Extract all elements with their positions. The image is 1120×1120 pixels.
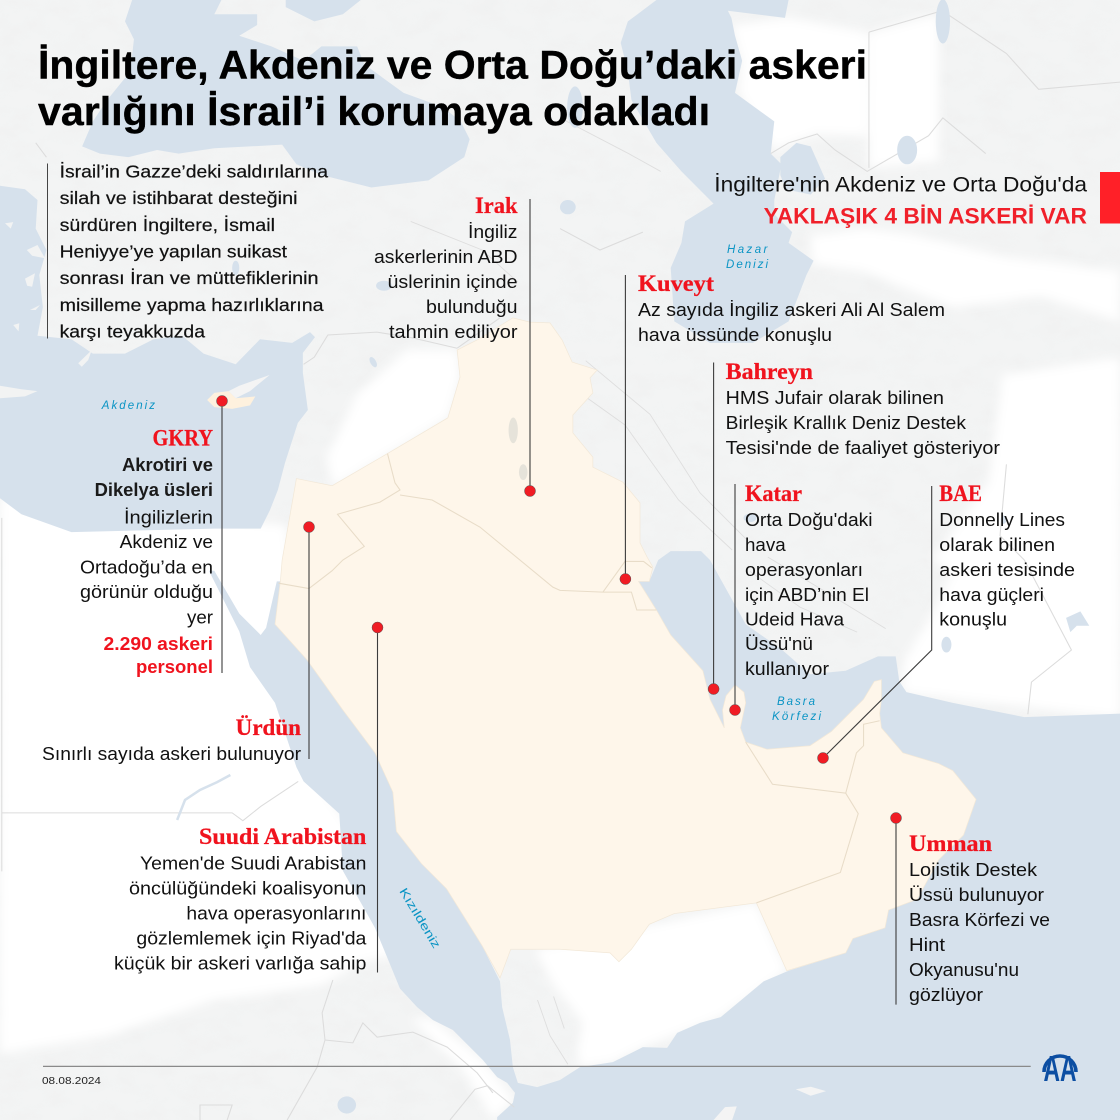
panel: Bahreyn: HMS Jufair olarak bilinen <box>726 387 944 408</box>
panel: Suudi Arabistan: Yemen'de Suudi Arabistan <box>140 853 366 874</box>
sea labels: Hazar <box>727 244 769 256</box>
panel: GKRY: görünür olduğu <box>80 581 213 602</box>
panel: BAE: olarak bilinen <box>939 534 1055 555</box>
intro text block: silah ve istihbarat desteğini <box>60 188 297 208</box>
panel: Bahreyn <box>708 359 1000 694</box>
panel: Kuveyt: hava üssünde konuşlu <box>638 324 832 345</box>
panel: BAE <box>818 481 1075 764</box>
Caspian Sea <box>621 0 814 343</box>
panel: GKRY <box>80 396 228 677</box>
panel: Kuveyt: Kuveyt <box>638 271 714 296</box>
icon: AA logo <box>1044 1048 1076 1089</box>
title: İngiltere, Akdeniz ve Orta Doğu’daki askeri <box>38 44 867 88</box>
panel: Suudi Arabistan: hava operasyonlarını <box>186 903 366 924</box>
panel: GKRY: personel <box>136 656 213 677</box>
intro text block <box>48 162 328 342</box>
intro text block: sonrası İran ve müttefiklerinin <box>60 268 319 288</box>
panel: Suudi Arabistan: gözlemlemek için Riyad'da <box>136 928 367 949</box>
panel: Irak: bulunduğu <box>426 296 518 317</box>
panel: Suudi Arabistan: Suudi Arabistan <box>199 824 367 849</box>
panel: BAE: BAE <box>939 481 982 506</box>
panel: BAE: konuşlu <box>939 609 1007 630</box>
sea labels: Körfezi <box>772 711 821 723</box>
Arabian Peninsula and Iraq highlighted land <box>275 318 976 978</box>
Cyprus <box>207 391 255 409</box>
top right callout <box>714 172 1120 229</box>
red accent bar <box>1100 172 1120 224</box>
islands <box>0 222 826 1120</box>
panel: Irak: askerlerinin ABD <box>374 246 518 267</box>
sea labels: Kızıldeniz <box>396 885 443 951</box>
panel: Katar: Üssü'nü <box>745 633 813 654</box>
panel: Katar: için ABD’nin El <box>745 584 869 605</box>
panel: Bahreyn: Bahreyn <box>726 359 813 384</box>
Black Sea <box>82 0 470 188</box>
intro text block: İsrail’in Gazze’deki saldırılarına <box>60 162 328 182</box>
panel: Irak: Irak <box>475 193 518 218</box>
panel: Umman: Basra Körfezi ve <box>909 909 1050 930</box>
panel: Irak <box>374 193 536 496</box>
panel: Katar <box>730 481 872 716</box>
icon: AA logo: AA <box>1044 1048 1076 1089</box>
panel: GKRY: 2.290 askeri <box>104 633 213 654</box>
sea labels: Akdeniz <box>101 400 155 412</box>
panel: Suudi Arabistan: öncülüğündeki koalisyonun <box>129 878 366 899</box>
sea labels: Basra <box>777 696 815 708</box>
intro text block: Heniyye’ye yapılan suikast <box>60 242 287 262</box>
panel: Katar: operasyonları <box>745 559 863 580</box>
panel: GKRY: yer <box>187 607 213 628</box>
intro text block: sürdüren İngiltere, İsmail <box>60 215 275 235</box>
panel: Umman: Üssü bulunuyor <box>909 884 1044 905</box>
panel: Suudi Arabistan <box>114 622 383 974</box>
panel: GKRY: Dikelya üsleri <box>95 479 213 500</box>
panel: Umman: Umman <box>909 831 992 856</box>
panel: BAE: hava güçleri <box>939 584 1044 605</box>
panel: Katar: Katar <box>745 481 802 506</box>
sea labels <box>101 244 821 951</box>
panel: Umman: gözlüyor <box>909 984 983 1005</box>
Lake Nasser <box>177 775 230 820</box>
date: 08.08.2024 <box>42 1075 101 1087</box>
panel: Irak: üslerinin içinde <box>388 271 518 292</box>
panel: BAE: Donnelly Lines <box>939 509 1065 530</box>
panel: GKRY: GKRY <box>152 426 213 451</box>
panel: GKRY: Akrotiri ve <box>122 454 213 475</box>
panel: Irak: İngiliz <box>468 221 518 242</box>
top right callout: İngiltere'nin Akdeniz ve Orta Doğu'da <box>714 174 1087 196</box>
panel: GKRY: Ortadoğu’da en <box>80 557 213 578</box>
panel: GKRY: İngilizlerin <box>124 507 213 528</box>
panel: Ürdün: Sınırlı sayıda askeri bulunuyor <box>42 743 301 764</box>
panel: Umman: Okyanusu'nu <box>909 959 1019 980</box>
intro text block: karşı teyakkuzda <box>60 322 205 342</box>
panel: BAE: askeri tesisinde <box>939 559 1075 580</box>
panel: GKRY: Akdeniz ve <box>120 531 213 552</box>
panel: Suudi Arabistan: küçük bir askeri varlığa sahip <box>114 953 366 974</box>
panel: Bahreyn: Tesisi'nde de faaliyet gösteriyor <box>726 437 1000 458</box>
footer rule <box>43 1065 1031 1067</box>
panel: Umman: Lojistik Destek <box>909 859 1038 880</box>
panel: Irak: tahmin ediliyor <box>389 321 518 342</box>
panel: Ürdün: Ürdün <box>236 715 301 740</box>
Indian Ocean, Persian Gulf and Red Sea <box>209 551 1120 1120</box>
Mediterranean <box>0 186 315 532</box>
panel: Umman: Hint <box>909 934 945 955</box>
panel: Ürdün <box>42 522 314 764</box>
panel: Bahreyn: Birleşik Krallık Deniz Destek <box>726 412 967 433</box>
panel: Katar: kullanıyor <box>745 658 829 679</box>
title: varlığını İsrail’i korumaya odakladı <box>38 90 710 134</box>
intro text block: misilleme yapma hazırlıklarına <box>60 295 324 315</box>
panel: Katar: hava <box>745 534 786 555</box>
panel: Kuveyt: Az sayıda İngiliz askeri Ali Al Salem <box>638 299 945 320</box>
panel: Kuveyt <box>620 271 945 584</box>
sea labels: Denizi <box>726 259 768 271</box>
top right callout: YAKLAŞIK 4 BİN ASKERİ VAR <box>764 204 1087 229</box>
title <box>38 44 867 134</box>
panel: Umman <box>890 812 1050 1005</box>
panel: Katar: Orta Doğu'daki <box>745 509 872 530</box>
panel: Katar: Udeid Hava <box>745 608 845 630</box>
